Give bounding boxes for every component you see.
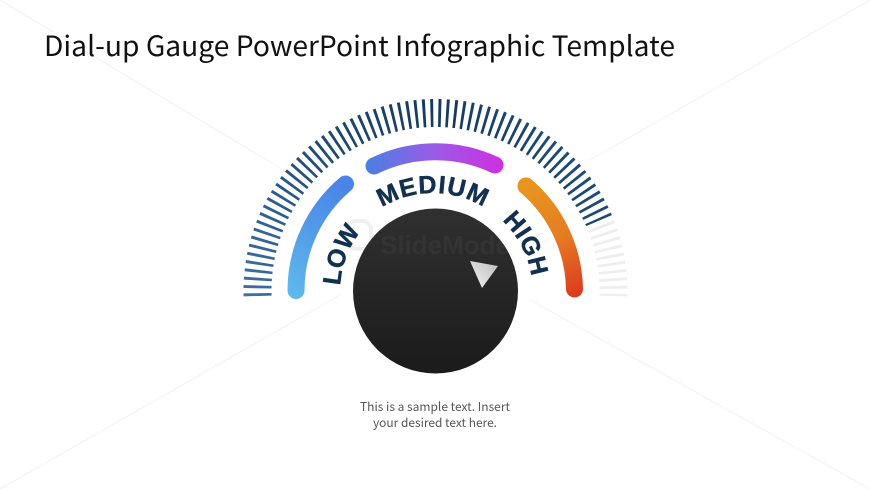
low arc (296, 184, 346, 290)
title: Dial-up Gauge PowerPoint Infographic Template (44, 25, 675, 65)
label: low: LOW (322, 222, 358, 284)
gauge tick scale (258, 113, 613, 296)
inactive ticks (601, 225, 613, 296)
caption: This is a sample text. Insert (360, 398, 510, 415)
watermark: SlideModel (380, 230, 517, 260)
caption: your desired text here. (373, 414, 497, 431)
label: high: HIGH (503, 210, 548, 275)
label: medium: MEDIUM (376, 176, 490, 206)
dial knob (353, 208, 518, 374)
watermark logo (347, 221, 371, 249)
dial pointer (470, 261, 498, 288)
high arc (526, 186, 574, 289)
medium arc (374, 152, 495, 166)
active ticks (258, 113, 599, 296)
